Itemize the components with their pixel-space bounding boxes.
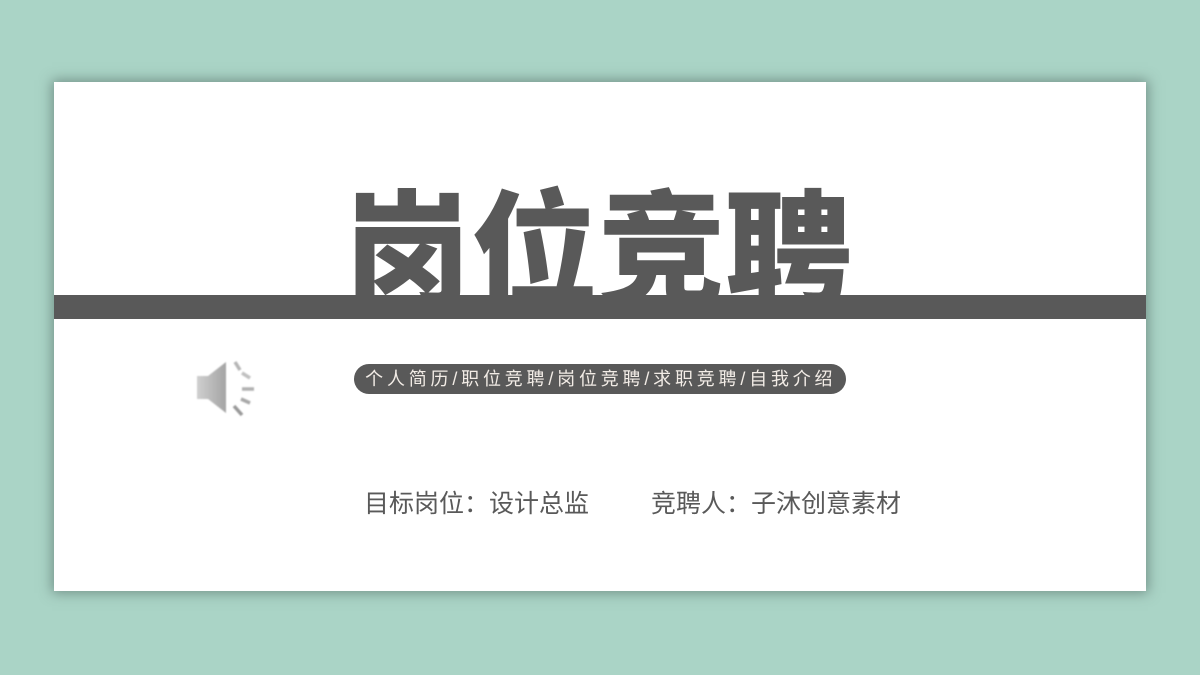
horizontal bar xyxy=(54,295,1146,319)
subtitle pill: 个人简历/职位竞聘/岗位竞聘/求职竞聘/自我介绍 xyxy=(365,369,836,389)
text: target position: 目标岗位：设计总监 xyxy=(364,490,589,518)
icon: speaker xyxy=(196,360,255,416)
panel: white card xyxy=(54,82,1146,591)
subtitle pill xyxy=(354,364,846,394)
text: candidate: 竞聘人：子沐创意素材 xyxy=(651,490,901,518)
